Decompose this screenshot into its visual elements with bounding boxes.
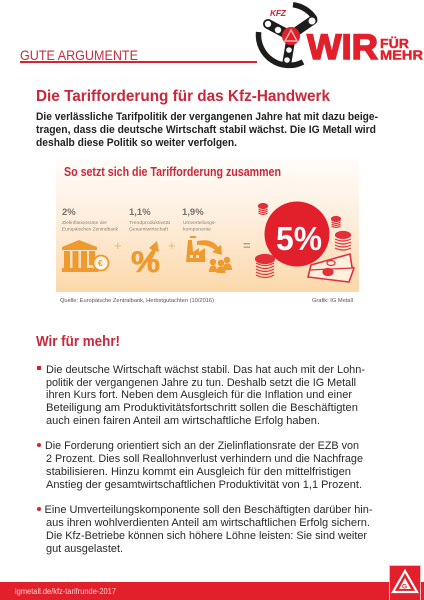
bullet 1 bbox=[37, 364, 365, 427]
component: 1.9 percent bbox=[182, 207, 216, 232]
icon: steering wheel bbox=[258, 5, 316, 65]
logo: IG Metall bbox=[390, 566, 420, 600]
footer band bbox=[0, 582, 424, 600]
component: 1.1 percent: 1,1% bbox=[129, 207, 151, 218]
logo: Kfz Wir für mehr bbox=[258, 5, 424, 67]
logo: IG Metall: G bbox=[402, 584, 407, 590]
intro text: Die verlässliche Tarifpolitik der vergangenen Jahre hat mit dazu beige- bbox=[36, 111, 378, 123]
result: 5 percent circle bbox=[264, 202, 330, 266]
bullet 1: politik der vergangenen Jahre zu tun. Deshalb setzt die IG Metall bbox=[46, 377, 356, 389]
component: 1.1 percent bbox=[129, 207, 171, 232]
logo: Kfz Wir für mehr: WIR bbox=[307, 28, 378, 67]
component: 2 percent: Europäischen Zentralbank bbox=[62, 226, 119, 232]
plus sign: + bbox=[168, 238, 176, 253]
component: 2 percent: 2% bbox=[62, 207, 76, 218]
bullet 3: Eine Umverteilungskomponente soll den Beschäftigten darüber hin- bbox=[44, 504, 373, 516]
source caption: Quelle: Europäische Zentralbank, Herbstgutachten (10/2016) bbox=[60, 298, 214, 304]
bullet 2: Anstieg der gesamtwirtschaftlichen Produktivität von 1,1 Prozent. bbox=[46, 479, 362, 491]
logo: Kfz Wir für mehr: KFZ bbox=[270, 8, 287, 18]
title: Die Tarifforderung für das Kfz-Handwerk bbox=[36, 88, 330, 105]
result: 5 percent circle: 5% bbox=[276, 220, 322, 257]
plus sign: + bbox=[114, 238, 122, 253]
section heading: Wir für mehr! bbox=[36, 333, 120, 350]
icon: bank with euro coin bbox=[62, 240, 108, 272]
bullet 3: Die Kfz-Betriebe können sich höhere Löhne leisten: Sie sind weiter bbox=[46, 530, 367, 542]
component: 1.1 percent: Gesamtwirtschaft bbox=[129, 226, 169, 232]
component: 1.9 percent: 1,9% bbox=[182, 207, 204, 218]
bullet 3: aus ihren wohlverdienten Anteil am wirtschaftlichen Erfolg sichern. bbox=[46, 517, 370, 529]
intro text: tragen, dass die deutsche Wirtschaft stabil wächst. Die IG Metall wird bbox=[36, 124, 376, 136]
bullet 1: Die deutsche Wirtschaft wächst stabil. Das hat auch mit der Lohn- bbox=[46, 364, 365, 376]
component: 1.9 percent: Umverteilungs- bbox=[183, 220, 216, 226]
component: 2 percent bbox=[62, 207, 119, 232]
bullet 1: Beteiligung am Produktivitätsfortschritt sollen die Beschäftigten bbox=[46, 402, 358, 414]
bullet 2: stabilisieren. Hinzu kommt ein Ausgleich für den mittelfristigen bbox=[46, 466, 351, 478]
bullet 2: 2 Prozent. Dies soll Reallohnverlust verhindern und die Nachfrage bbox=[46, 453, 363, 465]
logo: Kfz Wir für mehr: MEHR bbox=[380, 48, 424, 62]
bullet 2 bbox=[37, 440, 363, 491]
component: 1.9 percent: komponente bbox=[183, 226, 211, 232]
intro text: deshalb diese Politik so weiter verfolgen. bbox=[36, 137, 237, 149]
bullet 1: ihren Kurs fort. Neben dem Ausgleich für die Inflation und einer bbox=[46, 389, 352, 401]
bullet 3: gut ausgelastet. bbox=[46, 543, 123, 555]
panel heading: So setzt sich die Tarifforderung zusammen bbox=[64, 165, 281, 179]
component: 1.1 percent: Trendproduktivität bbox=[129, 220, 171, 226]
header label: Gute Argumente: GUTE ARGUMENTE bbox=[20, 47, 138, 63]
icon: bank with euro coin: € bbox=[98, 259, 103, 268]
icon: factory, arrow and people bbox=[186, 236, 232, 273]
bullet 3 bbox=[37, 504, 373, 555]
equals sign: = bbox=[243, 238, 251, 253]
icon: coins and banknotes bbox=[256, 204, 354, 282]
component: 2 percent: Zielinflationsrate der bbox=[62, 220, 107, 226]
bullet 2: Die Forderung orientiert sich an der Zielinflationsrate der EZB von bbox=[45, 440, 359, 452]
icon: percent with arrow: % bbox=[131, 246, 160, 279]
logo: Kfz Wir für mehr: FÜR bbox=[380, 36, 410, 51]
intro text bbox=[36, 111, 378, 149]
credit caption: Grafik: IG Metall bbox=[312, 298, 353, 304]
bullet 1: auch einen fairen Anteil am wirtschaftliche Erfolg haben. bbox=[46, 415, 320, 427]
footer band: igmetall.de/kfz-tarifrunde-2017 bbox=[15, 587, 117, 596]
panel: infographic bbox=[56, 159, 359, 292]
